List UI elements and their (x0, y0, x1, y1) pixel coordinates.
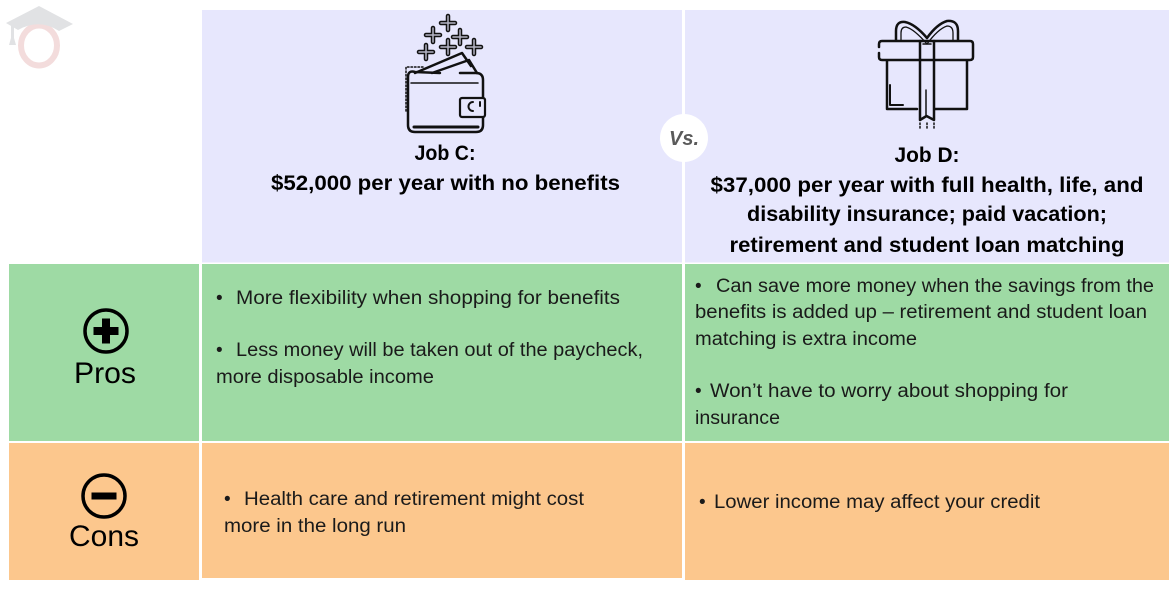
panel: Job C cons: • (224, 489, 231, 510)
panel: Job D pros: Won’t have to worry about shopping for (710, 381, 1069, 402)
heading: Job C: $52,000 per year with no benefits (271, 172, 620, 195)
heading: Job C (271, 142, 620, 195)
panel: Job C pros (202, 264, 682, 441)
icon: minus in circle (83, 475, 125, 517)
panel: Job D pros: matching is extra income (695, 329, 917, 350)
heading: Job D: $37,000 per year with full health, life, and (710, 174, 1144, 197)
row label: Cons: Cons (69, 520, 139, 553)
panel: Job C cons (202, 443, 682, 578)
panel: Job C cons: more in the long run (224, 516, 406, 537)
panel: Job D pros (685, 264, 1169, 441)
badge: Vs. (660, 114, 708, 162)
panel: Job C pros: More flexibility when shopping for benefits (236, 288, 620, 309)
row label: Pros (9, 264, 199, 441)
panel: Job C pros: Less money will be taken out of the paycheck, (236, 340, 643, 361)
icon: wallet with plus signs (406, 16, 485, 132)
panel: Job C header (202, 10, 682, 262)
heading: Job D: retirement and student loan matching (730, 234, 1124, 257)
panel: Job D pros: benefits is added up – retirement and student loan (695, 302, 1147, 323)
heading: Job C: Job C: (414, 142, 476, 165)
panel: Job C pros: • (216, 288, 223, 309)
panel: Job C pros: • (216, 340, 223, 361)
row label: Cons (9, 443, 199, 580)
panel: Job D pros: • (695, 276, 702, 297)
panel: Job D pros: insurance (695, 408, 780, 429)
row label: Pros: Pros (74, 357, 136, 390)
panel: Job D cons: Lower income may affect your credit (714, 492, 1041, 513)
heading: Job D (710, 144, 1144, 257)
heading: Job D: disability insurance; paid vacation; (747, 203, 1107, 226)
heading: Job D: Job D: (894, 144, 960, 167)
panel: Job C cons: Health care and retirement might cost (244, 489, 585, 510)
icon: plus in circle (85, 310, 127, 352)
panel: Job D cons: • (699, 492, 706, 513)
panel: Job D pros: • (695, 381, 702, 402)
badge: Vs.: Vs. (669, 128, 699, 150)
panel: Job C pros: more disposable income (216, 367, 434, 388)
panel: Job D header (685, 10, 1169, 262)
icon: gift box (879, 21, 973, 130)
logo: graduation cap and letter O (6, 6, 73, 66)
panel: Job D cons (685, 443, 1169, 580)
panel: Job D pros: Can save more money when the savings from the (716, 276, 1154, 297)
